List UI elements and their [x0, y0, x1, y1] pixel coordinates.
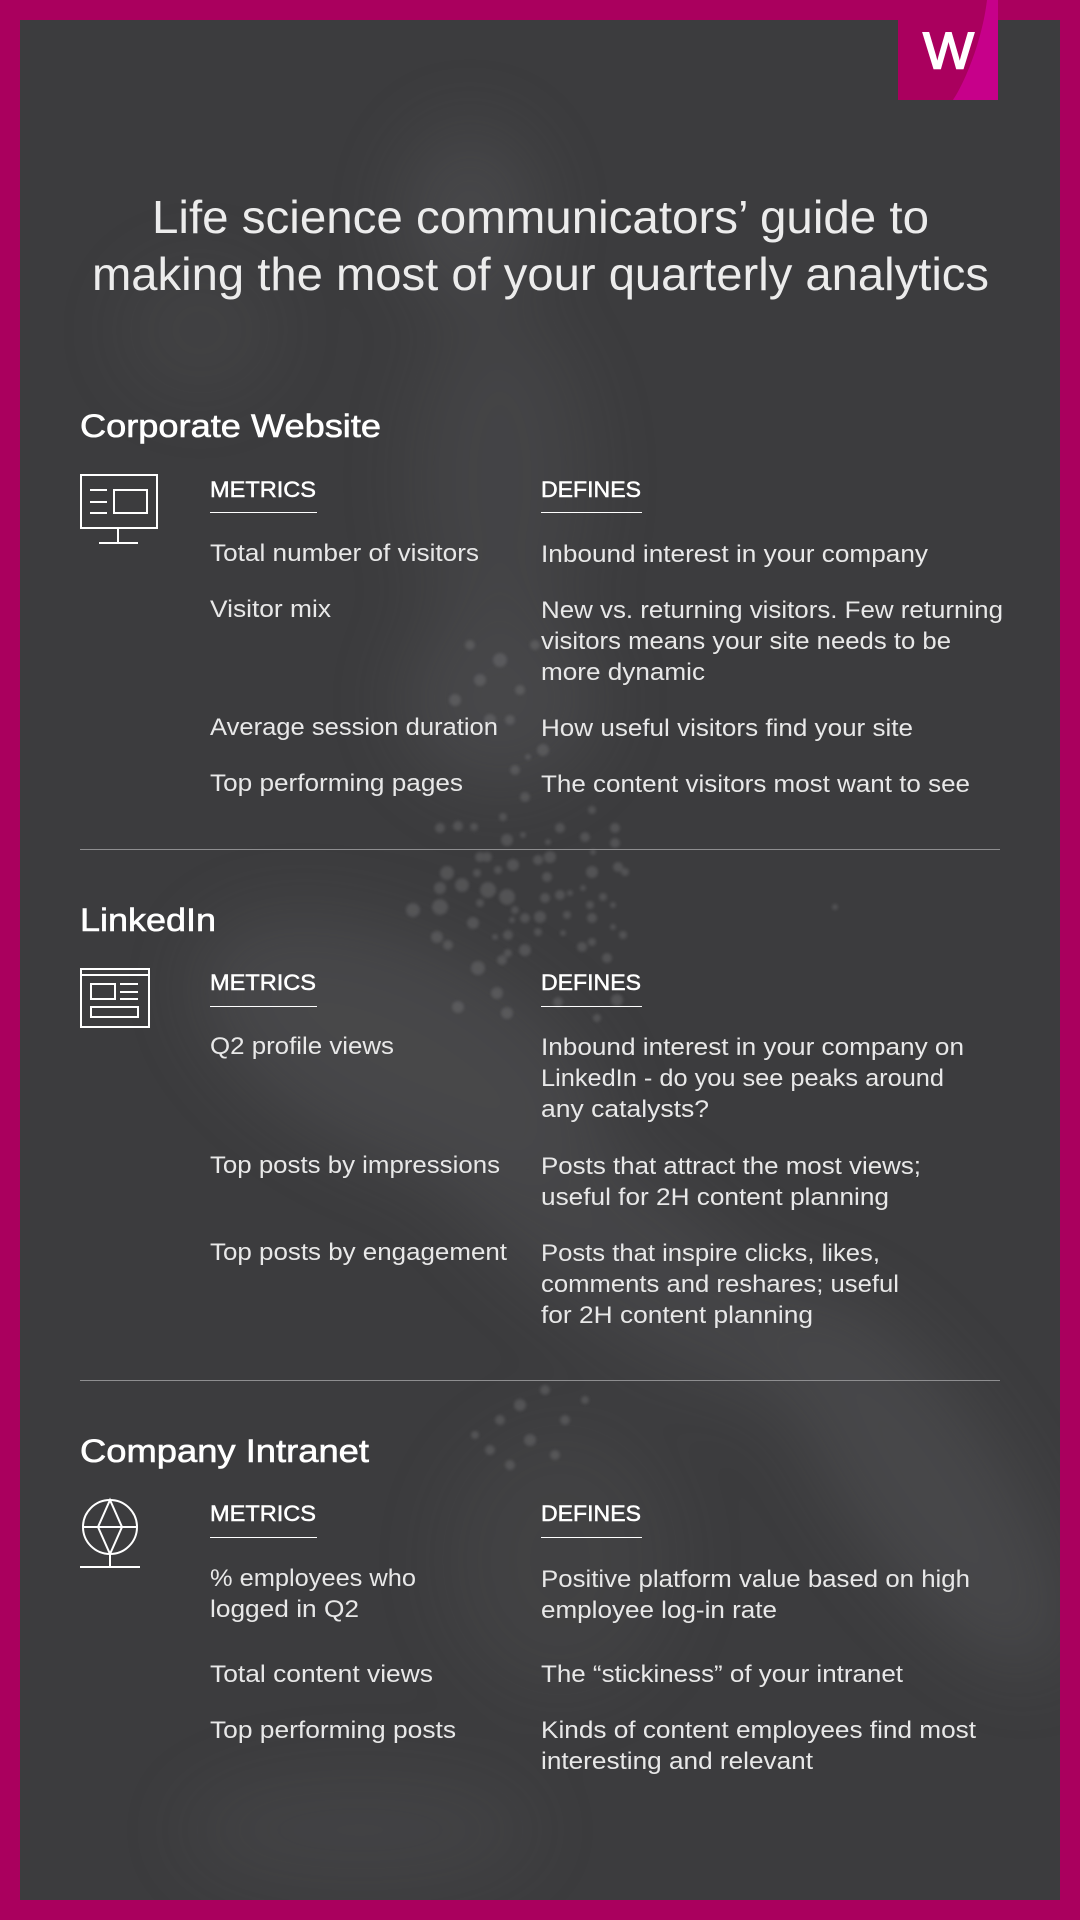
metrics column: METRICS	[210, 970, 316, 995]
defines column: LinkedIn - do you see peaks around	[541, 1065, 944, 1092]
metrics column	[210, 1501, 456, 1744]
defines column	[541, 477, 1003, 798]
logo	[898, 0, 998, 100]
heading: corporate website: Corporate Website	[80, 408, 381, 444]
panel: linkedin	[80, 902, 964, 1329]
metrics column: METRICS	[210, 477, 316, 502]
metrics column: METRICS	[210, 1501, 316, 1526]
icon: desktop monitor	[81, 475, 157, 543]
icon: globe on stand	[80, 1500, 140, 1567]
defines column: visitors means your site needs to be	[541, 628, 951, 655]
defines column: DEFINES	[541, 970, 641, 995]
metrics column	[210, 970, 507, 1266]
metrics column: Visitor mix	[210, 596, 331, 623]
defines column: Kinds of content employees find most	[541, 1717, 976, 1744]
panel: company intranet	[80, 1433, 976, 1775]
metrics column: Average session duration	[210, 714, 498, 741]
metrics column	[210, 477, 498, 797]
title	[92, 191, 989, 300]
defines column: DEFINES	[541, 477, 641, 502]
defines column: DEFINES	[541, 1501, 641, 1526]
metrics column: Total content views	[210, 1661, 433, 1688]
icon: web page layout	[81, 969, 149, 1027]
defines column: for 2H content planning	[541, 1302, 813, 1329]
background particles	[406, 640, 838, 1470]
title: Life science communicators’ guide to	[152, 191, 929, 243]
heading: linkedin: LinkedIn	[80, 902, 216, 938]
defines column: comments and reshares; useful	[541, 1271, 899, 1298]
defines column: How useful visitors find your site	[541, 715, 913, 742]
defines column	[541, 1501, 976, 1775]
metrics column: Top performing pages	[210, 770, 463, 797]
defines column: The “stickiness” of your intranet	[541, 1661, 903, 1688]
metrics column: Q2 profile views	[210, 1033, 394, 1060]
defines column: more dynamic	[541, 659, 705, 686]
title: making the most of your quarterly analytics	[92, 248, 989, 300]
defines column	[541, 970, 964, 1329]
metrics column: % employees who	[210, 1565, 416, 1592]
defines column: The content visitors most want to see	[541, 771, 970, 798]
defines column: employee log-in rate	[541, 1597, 777, 1624]
metrics column: Total number of visitors	[210, 540, 479, 567]
defines column: Posts that inspire clicks, likes,	[541, 1240, 880, 1267]
metrics column: Top posts by engagement	[210, 1239, 507, 1266]
metrics column: Top performing posts	[210, 1717, 456, 1744]
defines column: interesting and relevant	[541, 1748, 813, 1775]
metrics column: logged in Q2	[210, 1596, 359, 1623]
metrics column: Top posts by impressions	[210, 1152, 500, 1179]
defines column: Inbound interest in your company	[541, 541, 929, 568]
heading: company intranet: Company Intranet	[80, 1433, 369, 1469]
defines column: Inbound interest in your company on	[541, 1034, 964, 1061]
defines column: any catalysts?	[541, 1096, 709, 1123]
defines column: Posts that attract the most views;	[541, 1153, 921, 1180]
defines column: New vs. returning visitors. Few returning	[541, 597, 1003, 624]
logo: W	[923, 22, 974, 80]
defines column: useful for 2H content planning	[541, 1184, 889, 1211]
panel: corporate website	[80, 408, 1003, 798]
defines column: Positive platform value based on high	[541, 1566, 970, 1593]
